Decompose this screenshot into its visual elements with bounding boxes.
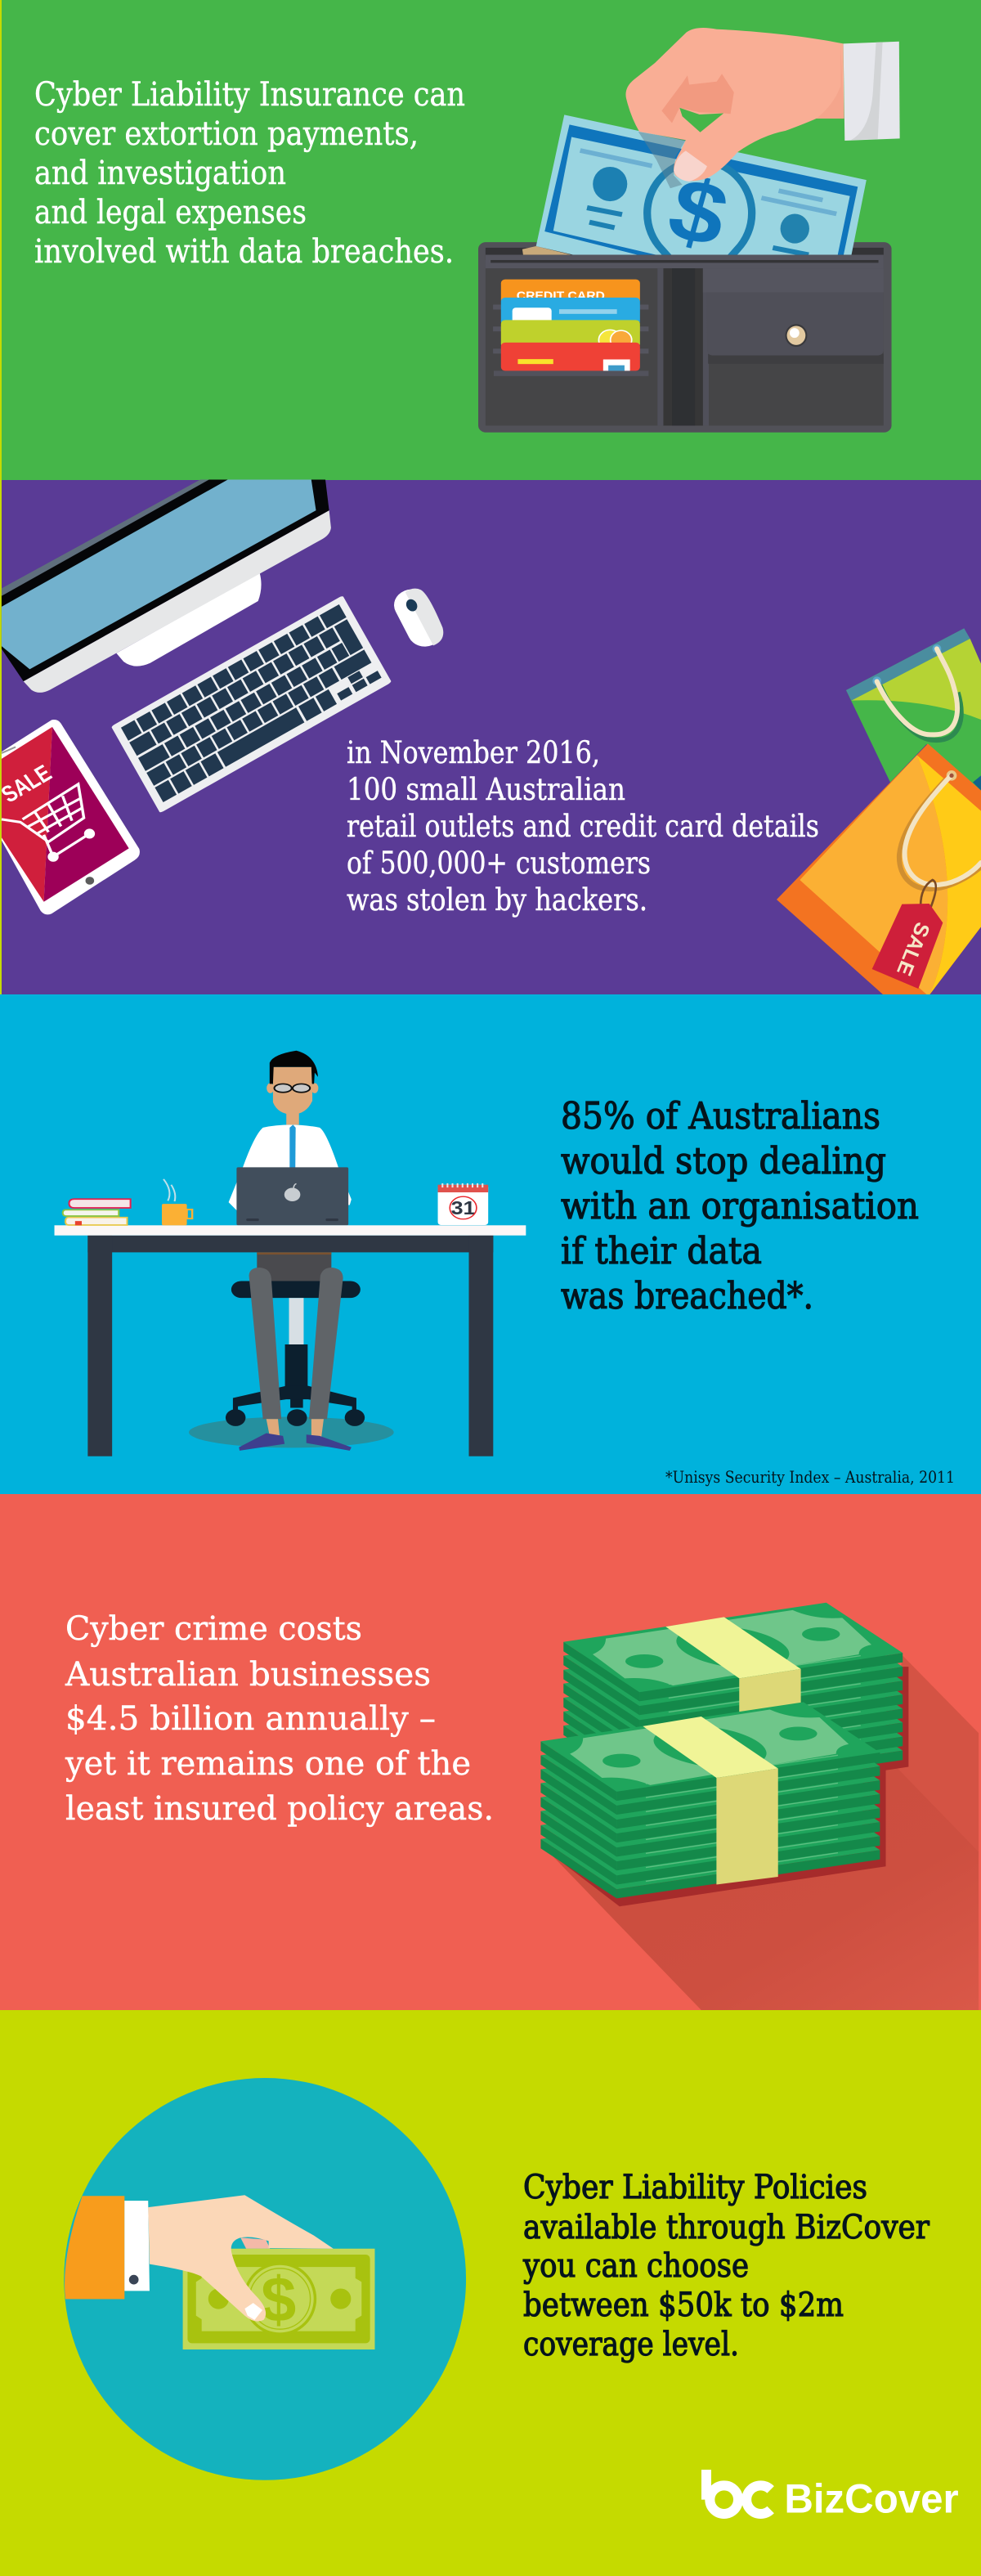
- icon: credit cards: [494, 280, 648, 376]
- text: cost statement: $4.5 billion annually –: [65, 1700, 436, 1738]
- icon: tablet with sale screen: [0, 720, 140, 914]
- text: coverage statement: between $50k to $2m: [523, 2287, 844, 2324]
- icon: wallet back: [478, 242, 892, 433]
- icon: banknote: $: [261, 2265, 296, 2336]
- text: breach statement: in November 2016,: [347, 735, 600, 770]
- icon: shopping cart: [2, 784, 93, 860]
- text: coverage statement: [522, 2169, 930, 2363]
- text: breach statement: 100 small Australian: [347, 772, 625, 807]
- icon: hand: [625, 28, 844, 182]
- icon: calendar: [438, 1183, 488, 1225]
- icon: white cuff: [124, 2201, 150, 2291]
- icon: floor shadow: [189, 1417, 394, 1447]
- text: 85% statistic: with an organisation: [561, 1184, 919, 1227]
- text: breach statement: retail outlets and credit card details: [347, 809, 819, 844]
- icon: calendar: 31: [451, 1198, 476, 1219]
- text: insurance cover statement: and legal expenses: [34, 194, 307, 231]
- text: breach statement: [347, 735, 819, 918]
- icon: teal circle: [64, 2078, 466, 2480]
- icon: shirt cuff: [844, 42, 900, 141]
- icon: orange shopping bag: [777, 743, 981, 994]
- icon: desk: [87, 1236, 493, 1456]
- icon: banknote: [183, 2249, 374, 2349]
- icon: hand putting banknote into wallet: [478, 28, 900, 433]
- icon: stacks of banknotes with long shadow: [540, 1603, 979, 2010]
- text: coverage statement: available through BizCover: [523, 2209, 930, 2246]
- text: insurance cover statement: Cyber Liability Insurance can: [34, 76, 465, 114]
- text: insurance cover statement: involved with data breaches.: [34, 233, 454, 271]
- icon: banknote: $: [658, 159, 738, 266]
- text: insurance cover statement: [34, 76, 465, 271]
- icon: credit cards: CREDIT CARD: [517, 289, 605, 303]
- text: 85% statistic: 85% of Australians: [561, 1094, 880, 1138]
- icon: finger behind note: [240, 2237, 270, 2249]
- icon: keyboard: [111, 595, 392, 813]
- icon: stack of books: [63, 1199, 131, 1225]
- text: BizCover wordmark: BizCover: [784, 2475, 959, 2521]
- text: cost statement: [65, 1610, 494, 1828]
- icon: bc monogram: [706, 2470, 771, 2514]
- icon: orange sleeve: [65, 2196, 124, 2299]
- icon: sale tag: SALE: [892, 919, 934, 979]
- panel: cyber liability insurance cover: [0, 0, 981, 994]
- icon: legs and shoes: [239, 1268, 352, 1451]
- icon: desktop computer, keyboard, mouse and tablet: [0, 480, 448, 914]
- icon: hand holding banknote in circle: [64, 2078, 466, 2480]
- panel: coverage levels: [0, 2010, 981, 2576]
- icon: coffee mug: [162, 1179, 192, 1225]
- text: coverage statement: you can choose: [522, 2247, 749, 2285]
- logo: BizCover: [706, 2470, 959, 2521]
- text: 85% statistic: if their data: [561, 1229, 762, 1272]
- text: 85% statistic: [561, 1094, 919, 1317]
- icon: office chair: [226, 1252, 365, 1426]
- icon: shopping bags: [777, 628, 981, 994]
- icon: long shadow: [540, 1656, 979, 2010]
- icon: wallet front: [486, 255, 884, 425]
- panel: cost of cyber crime: [0, 1494, 981, 2010]
- text: 85% statistic: was breached*.: [561, 1274, 813, 1317]
- text: insurance cover statement: and investigation: [34, 155, 286, 192]
- icon: monitor: [2, 480, 331, 693]
- text: 85% statistic: would stop dealing: [561, 1139, 886, 1183]
- text: insurance cover statement: cover extortion payments,: [34, 115, 419, 153]
- icon: desktop surface: [55, 1225, 526, 1236]
- icon: man working at desk: [55, 1051, 526, 1456]
- icon: monitor stand: [116, 573, 262, 666]
- icon: front stack of banknotes: [540, 1702, 886, 1906]
- text: breach statement: of 500,000+ customers: [347, 846, 651, 881]
- text: breach statement: was stolen by hackers.: [347, 882, 647, 918]
- panel: retail data breach: [0, 480, 981, 994]
- text: cost statement: Cyber crime costs: [65, 1610, 362, 1648]
- icon: banknote: [536, 114, 867, 266]
- text: cost statement: yet it remains one of the: [65, 1745, 471, 1783]
- text: coverage statement: coverage level.: [523, 2326, 739, 2363]
- icon: hand: [148, 2195, 334, 2322]
- text: cost statement: Australian businesses: [65, 1656, 431, 1694]
- icon: back stack of banknotes: [563, 1603, 908, 1807]
- icon: green shopping bag: [846, 628, 981, 796]
- icon: mouse: [388, 584, 448, 652]
- icon: sale tag: [872, 904, 943, 989]
- panel: Australians stop dealing after a breach: [0, 994, 981, 1494]
- text: coverage statement: Cyber Liability Policies: [523, 2169, 867, 2206]
- icon: laptop: [236, 1167, 348, 1225]
- icon: man torso and head: [229, 1051, 352, 1210]
- text: cost statement: least insured policy areas.: [65, 1790, 494, 1828]
